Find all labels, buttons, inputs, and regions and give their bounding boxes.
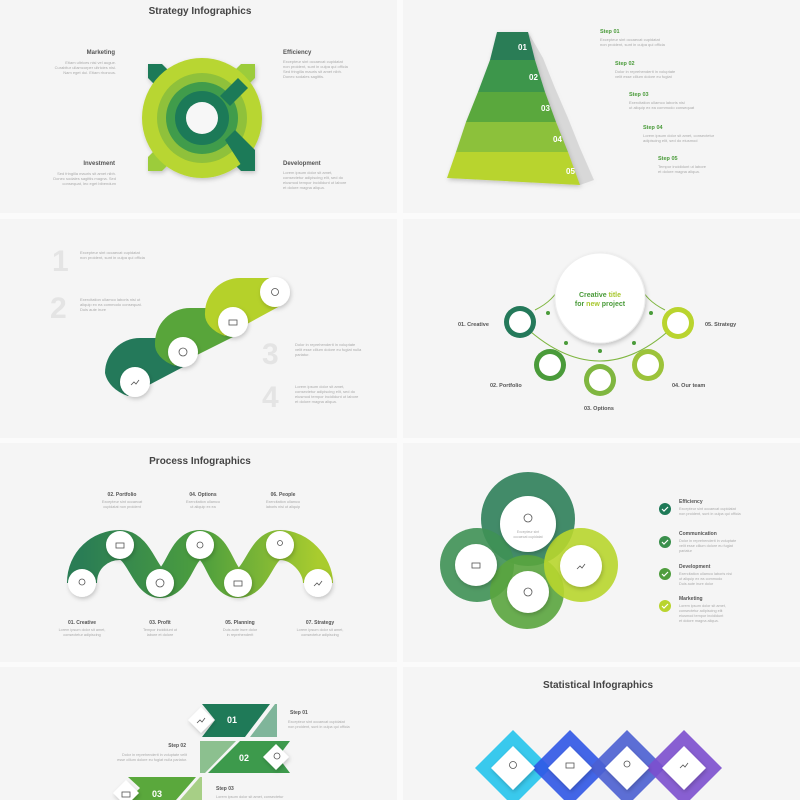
text: development	[283, 161, 347, 190]
title: process: Process Infographics	[149, 456, 251, 467]
text: steps: Lorem ipsum dolor sit amet, consectetur	[643, 133, 715, 138]
text: efficiency: Donec sodales sagittis.	[283, 74, 324, 79]
text: marketing: Etiam ultrices nisi vel augue.	[65, 60, 116, 65]
panel: steps bands	[0, 667, 397, 800]
text: process labels: 03. Profit	[149, 620, 171, 626]
text: option labels: 04. Our team	[672, 383, 705, 389]
callout: center circle: Creative title	[579, 292, 621, 299]
text: steps: velit esse cillum dolore eu fugiat	[615, 74, 673, 79]
text: marketing: Marketing	[87, 50, 115, 56]
text: process labels: 01. Creative	[68, 620, 96, 626]
text: step labels: Lorem ipsum dolor sit amet, consectetur	[216, 795, 284, 799]
list: checklist: Efficiency	[679, 499, 703, 505]
text: development: eiusmod tempor incididunt ut labore	[283, 180, 347, 185]
chart: step bands: 02	[239, 753, 249, 763]
panel: pyramid	[403, 0, 800, 213]
callout: center circle	[555, 253, 645, 343]
text: numbers	[50, 245, 279, 414]
text: process labels: Exercitation ullamco	[266, 500, 300, 504]
list: checklist: ut aliquip ex ea commodo	[679, 577, 722, 581]
panel: creative title	[403, 219, 800, 438]
title: strategy: Strategy Infographics	[149, 6, 252, 17]
text: numbers: 4	[262, 381, 279, 414]
chart: staircase ribbons	[105, 277, 290, 397]
text: investment: Donec sodales sagittis magna. Sed	[53, 176, 116, 181]
panel: numbered steps: Excepteur sint occaecat cupidatat	[80, 250, 141, 255]
text: process labels	[59, 492, 343, 637]
text: process labels: Tempor incididunt ut	[143, 628, 178, 632]
text: process labels: in reprehenderit	[227, 633, 254, 637]
text: steps: Tempor incididunt ut labore	[658, 164, 707, 169]
text: efficiency	[283, 50, 349, 79]
text: process labels: laboris nisi ut aliquip	[266, 505, 300, 509]
chart: overlapping circles: occaecat cupidatat	[513, 535, 543, 539]
text: process labels: 04. Options	[189, 492, 217, 498]
text: investment: Investment	[83, 161, 115, 167]
list: checklist: et dolore magna aliqua.	[679, 619, 719, 623]
text: steps: et dolore magna aliqua.	[658, 169, 700, 174]
text: development: et dolore magna aliqua.	[283, 185, 325, 190]
chart: step bands	[113, 704, 290, 800]
text: efficiency: non proident, sunt in culpa qui officia	[283, 64, 349, 69]
panel: numbered steps: consectetur adipiscing elit, sed do	[295, 389, 356, 394]
text: steps	[600, 29, 715, 174]
chart: diamonds	[475, 730, 722, 800]
panel: numbered steps: eiusmod tempor incididunt ut labore	[295, 394, 359, 399]
text: process labels: consectetur adipiscing	[63, 633, 101, 637]
list: checklist: Dolor in reprehenderit in voluptate	[679, 539, 736, 543]
list: checklist: non proident, sunt in culpa qui officia	[679, 512, 741, 516]
text: numbers: 3	[262, 338, 279, 371]
text: marketing: Nam eget dui. Etiam rhoncus.	[63, 70, 116, 75]
list: checklist: velit esse cillum dolore eu fugiat	[679, 544, 734, 548]
panel: numbered steps: pariatur.	[295, 352, 309, 357]
icons: option circles	[504, 306, 694, 396]
callout: center circle: for new project	[575, 301, 626, 308]
text: numbers: 1	[52, 245, 69, 278]
panel: numbered steps: Exercitation ullamco laboris nisi ut	[80, 297, 141, 302]
text: step labels: non proident, sunt in culpa qui officia	[288, 725, 350, 729]
panel: numbered steps	[0, 219, 397, 438]
text: steps: Step 03	[629, 92, 649, 98]
text: process labels: 07. Strategy	[306, 620, 334, 626]
text: step labels: Step 03	[216, 786, 234, 792]
text: development: consectetur adipiscing elit, sed do	[283, 175, 344, 180]
text: steps: Step 02	[615, 61, 635, 67]
text: step labels: Step 02	[168, 743, 186, 749]
text: process labels: cupidatat non proident	[103, 505, 142, 509]
text: process labels: Duis aute irure dolor	[223, 628, 258, 632]
text: process labels: Exercitation ullamco	[186, 500, 220, 504]
text: process labels: consectetur adipiscing	[301, 633, 339, 637]
text: step labels: esse cillum dolore eu fugiat nulla pariatur.	[117, 758, 187, 762]
text: steps: non proident, sunt in culpa qui officia	[600, 42, 666, 47]
text: efficiency: Excepteur sint occaecat cupidatat	[283, 59, 344, 64]
list: checklist: Excepteur sint occaecat cupidatat	[679, 507, 737, 511]
text: option labels: 03. Options	[584, 406, 614, 412]
text: step labels: Dolor in reprehenderit in voluptate velit	[122, 753, 188, 757]
chart: pyramid layers: 03	[541, 104, 550, 113]
text: process labels: Lorem ipsum dolor sit amet,	[297, 628, 343, 632]
text: marketing	[55, 50, 116, 75]
chart: arc connector	[520, 322, 678, 361]
chart: pyramid layers: 01	[518, 43, 527, 52]
text: development: Development	[283, 161, 321, 167]
panel: numbered steps: velit esse cillum dolore eu fugiat nulla	[295, 347, 362, 352]
text: numbers: 2	[50, 292, 67, 325]
text: efficiency: Sed fringilla mauris sit amet nibh.	[283, 69, 342, 74]
text: marketing: Curabitur ullamcorper ultricies nisi.	[55, 65, 116, 70]
chart: step bands: 01	[227, 715, 237, 725]
panel: numbered steps: aliquip ex ea commodo consequat.	[80, 302, 142, 307]
text: steps: Exercitation ullamco laboris nisi	[629, 100, 685, 105]
panel: numbered steps: Duis aute irure	[80, 307, 107, 312]
panel: statistical	[403, 667, 800, 800]
list: checklist: Duis aute irure dolor	[679, 582, 714, 586]
text: step labels: Step 01	[290, 710, 308, 716]
chart: pyramid layers: 05	[566, 167, 575, 176]
text: process labels: labore et dolore	[147, 633, 173, 637]
text: step labels	[117, 710, 350, 799]
text: option labels	[458, 322, 737, 412]
text: process labels: ut aliquip ex ea	[190, 505, 217, 509]
text: process labels: Lorem ipsum dolor sit amet,	[59, 628, 105, 632]
list: checklist: eiusmod tempor incididunt	[679, 614, 724, 618]
chart: pyramid layers: 02	[529, 73, 538, 82]
text: steps: Dolor in reprehenderit in voluptate	[615, 69, 676, 74]
text: option labels: 02. Portfolio	[490, 383, 522, 389]
chart: overlapping circles: Excepteur sint	[517, 530, 539, 534]
chart: target rings	[142, 58, 262, 178]
list: checklist: Communication	[679, 531, 717, 537]
chart: pyramid layers: 04	[553, 135, 562, 144]
list: checklist: Exercitation ullamco laboris nisi	[679, 572, 732, 576]
text: steps: Step 01	[600, 29, 620, 35]
text: development: Lorem ipsum dolor sit amet,	[283, 170, 332, 175]
list: checklist: Lorem ipsum dolor sit amet,	[679, 604, 726, 608]
text: process labels: 05. Planning	[225, 620, 255, 626]
panel: circles checklist	[403, 443, 800, 662]
text: investment	[53, 161, 117, 186]
list: checklist: Development	[679, 564, 711, 570]
text: option labels: 01. Creative	[458, 322, 489, 328]
list: checklist	[659, 499, 741, 623]
panel: strategy	[0, 0, 397, 213]
text: steps: Excepteur sint occaecat cupidatat	[600, 37, 661, 42]
text: process labels: 06. People	[271, 492, 296, 498]
text: process labels: Excepteur sint occaecat	[102, 500, 143, 504]
text: option labels: 05. Strategy	[705, 322, 737, 328]
chart: step bands: 03	[152, 789, 162, 799]
list: checklist: pariatur	[679, 549, 693, 553]
chart: wave	[82, 545, 318, 583]
list: checklist: Marketing	[679, 596, 703, 602]
text: steps: adipiscing elit, sed do eiusmod	[643, 138, 697, 143]
panel: numbered steps: et dolore magna aliqua.	[295, 399, 337, 404]
list: checklist: consectetur adipiscing elit	[679, 609, 723, 613]
panel: numbered steps: Lorem ipsum dolor sit amet,	[295, 384, 344, 389]
panel: numbered steps: Dolor in reprehenderit in voluptate	[295, 342, 356, 347]
panel: process	[0, 443, 397, 662]
text: steps: Step 04	[643, 125, 664, 131]
text: efficiency: Efficiency	[283, 50, 312, 56]
panel: numbered steps: non proident, sunt in culpa qui officia	[80, 255, 146, 260]
chart: overlapping circles	[440, 472, 618, 629]
text: process labels: 02. Portfolio	[108, 492, 136, 498]
chart: pyramid layers	[447, 32, 594, 185]
text: steps: Step 05	[658, 156, 678, 162]
text: investment: Sed fringilla mauris sit amet nibh.	[57, 171, 116, 176]
title: statistical: Statistical Infographics	[543, 680, 653, 691]
text: investment: consequat, leo eget bibendum	[62, 181, 117, 186]
text: step labels: Excepteur sint occaecat cupidatat	[288, 720, 346, 724]
text: steps: ut aliquip ex ea commodo consequat	[629, 105, 695, 110]
